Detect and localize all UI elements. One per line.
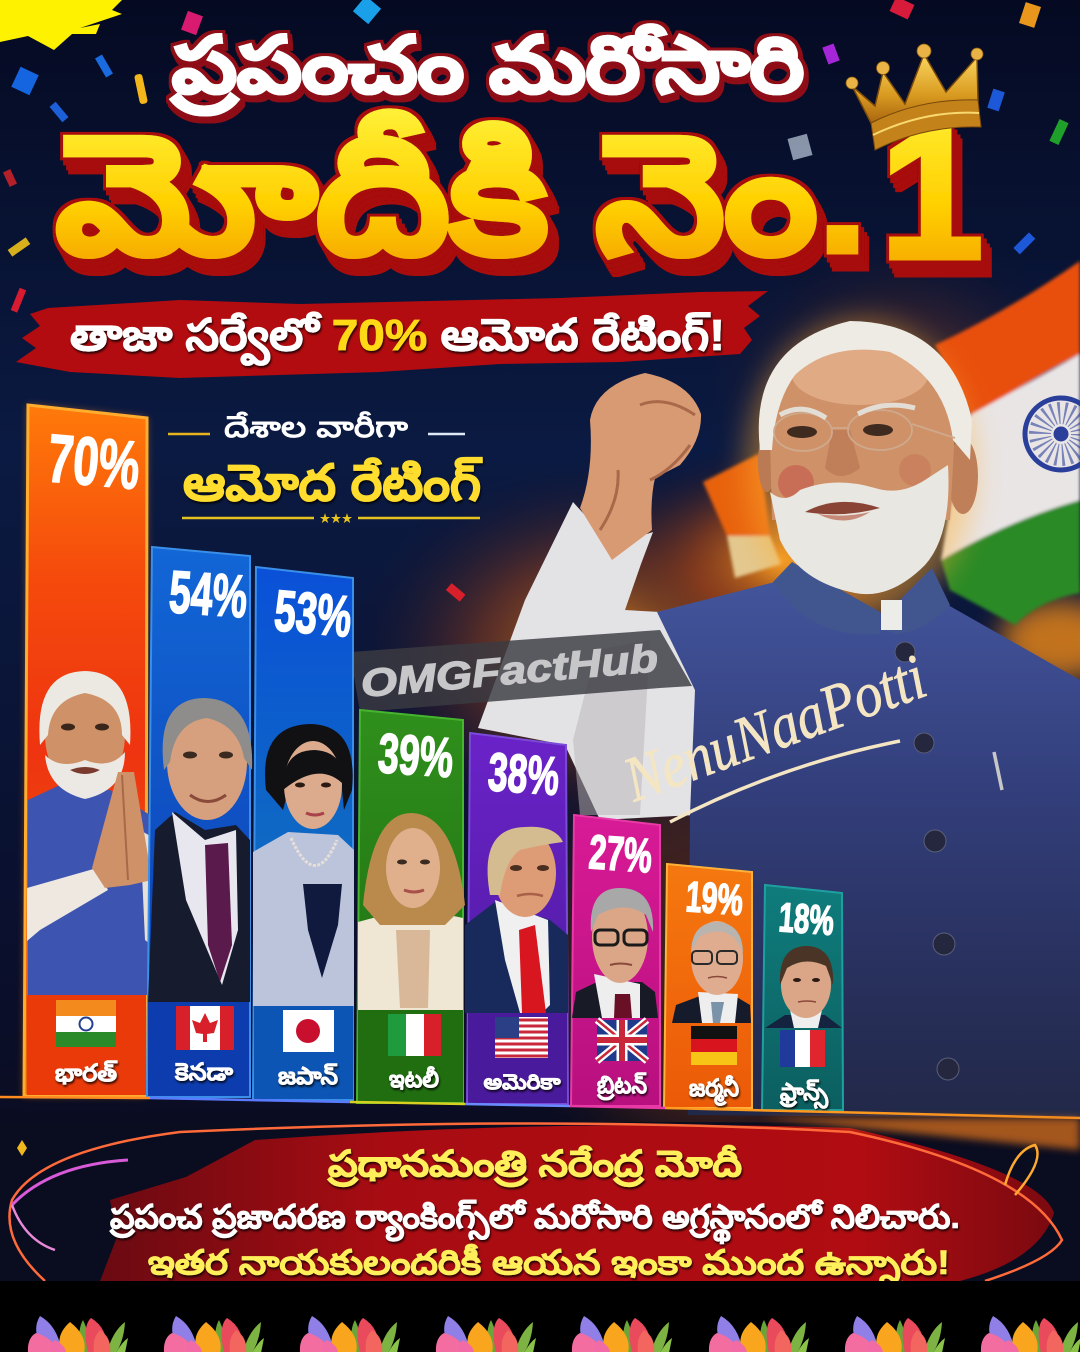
bar: USA 38%: 38%: [486, 742, 561, 807]
black footer band: [0, 1281, 1080, 1352]
kurta sleeve: [478, 502, 695, 820]
heading: rating by country: ఆమోద రేటింగ్: [183, 455, 483, 511]
bar: France 18%: ఫ్రాన్స్: [779, 1079, 829, 1109]
title line 2: మోదీకి: [56, 104, 548, 287]
glasses and eyes: [787, 426, 817, 438]
panel line 2: ప్రపంచ ప్రజాదరణ ర్యాంకింగ్స్‌లో మరోసారి అగ్రస్థానంలో నిలిచారు.: [109, 1198, 960, 1244]
bar: Italy 39%: [357, 710, 465, 1103]
title line 1: ప్రపంచం మరోసారి: [170, 21, 804, 116]
icon: ashoka chakra: [1025, 398, 1080, 470]
bar: India 70%: [24, 405, 157, 1096]
bar: Japan 53%: [253, 567, 354, 1100]
flag: France: [780, 1030, 825, 1067]
footer flower row: [28, 1316, 1080, 1352]
icon: gold crown: [846, 44, 983, 150]
bar: Canada 54%: 54%: [167, 558, 250, 630]
flag behind leader: [703, 261, 1080, 625]
bar: Germany 19%: జర్మనీ: [689, 1075, 739, 1106]
neon outline: [9, 1124, 1062, 1281]
bar: India 70%: 70%: [45, 420, 143, 504]
portrait: Carney: [148, 698, 252, 1002]
portrait: Trump: [465, 827, 568, 1013]
white hair: [759, 321, 972, 460]
portrait: Meloni: [358, 813, 465, 1010]
title line 2: 1: [880, 91, 983, 298]
bar: USA 38%: అమెరికా: [484, 1071, 561, 1094]
flag: India: [56, 1000, 116, 1047]
bar: Germany 19%: 19%: [684, 873, 745, 925]
red brush banner: [16, 291, 768, 378]
neon stage floor line: [0, 1097, 1080, 1118]
watermark: OMGFactHub: OMGFactHub: [359, 637, 660, 706]
bar: Italy 39%: ఇటలీ: [389, 1066, 439, 1093]
panel headline: ప్రధానమంత్రి నరేంద్ర మోదీ: [326, 1143, 742, 1187]
bar: Germany 19%: [664, 864, 752, 1108]
confetti pieces: [3, 0, 1069, 602]
cheeks and nose: [778, 465, 814, 501]
heading: rating by country: ★★★: [320, 513, 352, 525]
bar: India 70%: భారత్: [55, 1060, 117, 1087]
portrait: Macron: [765, 946, 842, 1028]
portrait: Modi: [27, 671, 157, 995]
bottom message panel: [0, 1118, 1080, 1286]
raised fist: [580, 373, 701, 560]
flag: Germany: [691, 1026, 737, 1065]
flag: Japan: [283, 1010, 334, 1052]
title line 2: నెం.: [596, 104, 868, 287]
pocket pen: [994, 752, 1002, 790]
bar: Italy 39%: 39%: [376, 721, 455, 789]
title line 2: [56, 91, 983, 298]
bar: UK 27%: 27%: [587, 826, 654, 883]
face: [770, 332, 955, 520]
watermark: NenuNaaPotti signature: NenuNaaPotti: [614, 641, 935, 815]
ears: [948, 438, 978, 514]
yellow starburst corner: [0, 0, 122, 50]
large leader figure: [478, 321, 1080, 1118]
flag: Canada: [176, 1006, 234, 1050]
blue jacket: [657, 565, 1080, 1118]
bar: Japan 53%: జపాన్: [278, 1063, 338, 1090]
portrait: Starmer: [572, 888, 658, 1018]
heading: rating by country: దేశాల వారీగా: [224, 411, 408, 444]
flag: USA: [495, 1017, 548, 1058]
bar: UK 27%: బ్రిటన్: [597, 1072, 647, 1101]
bar: USA 38%: [465, 733, 568, 1104]
bar: France 18%: [762, 885, 843, 1110]
jacket buttons: [895, 642, 959, 1080]
bar: Canada 54%: కెనడా: [174, 1059, 234, 1086]
flag: UK: [597, 1020, 647, 1061]
watermark: OMGFactHub: [350, 630, 692, 712]
glowing outline of leader: [745, 320, 975, 620]
portrait: Takaichi: [253, 724, 354, 1006]
bar: Canada 54%: [147, 547, 252, 1097]
panel line 3: ఇతర నాయకులందరికీ ఆయన ఇంకా ముంద ఉన్నారు!: [148, 1243, 950, 1286]
bar: UK 27%: [571, 815, 660, 1106]
heading: rating by country: [168, 411, 483, 525]
portrait: Merz: [672, 921, 751, 1023]
white beard: [770, 465, 949, 594]
bar: Japan 53%: 53%: [272, 578, 354, 650]
bar: France 18%: 18%: [777, 894, 835, 944]
banner text: తాజా సర్వేలో 70% ఆమోద రేటింగ్!: [70, 311, 725, 366]
flag: Italy: [388, 1014, 441, 1056]
